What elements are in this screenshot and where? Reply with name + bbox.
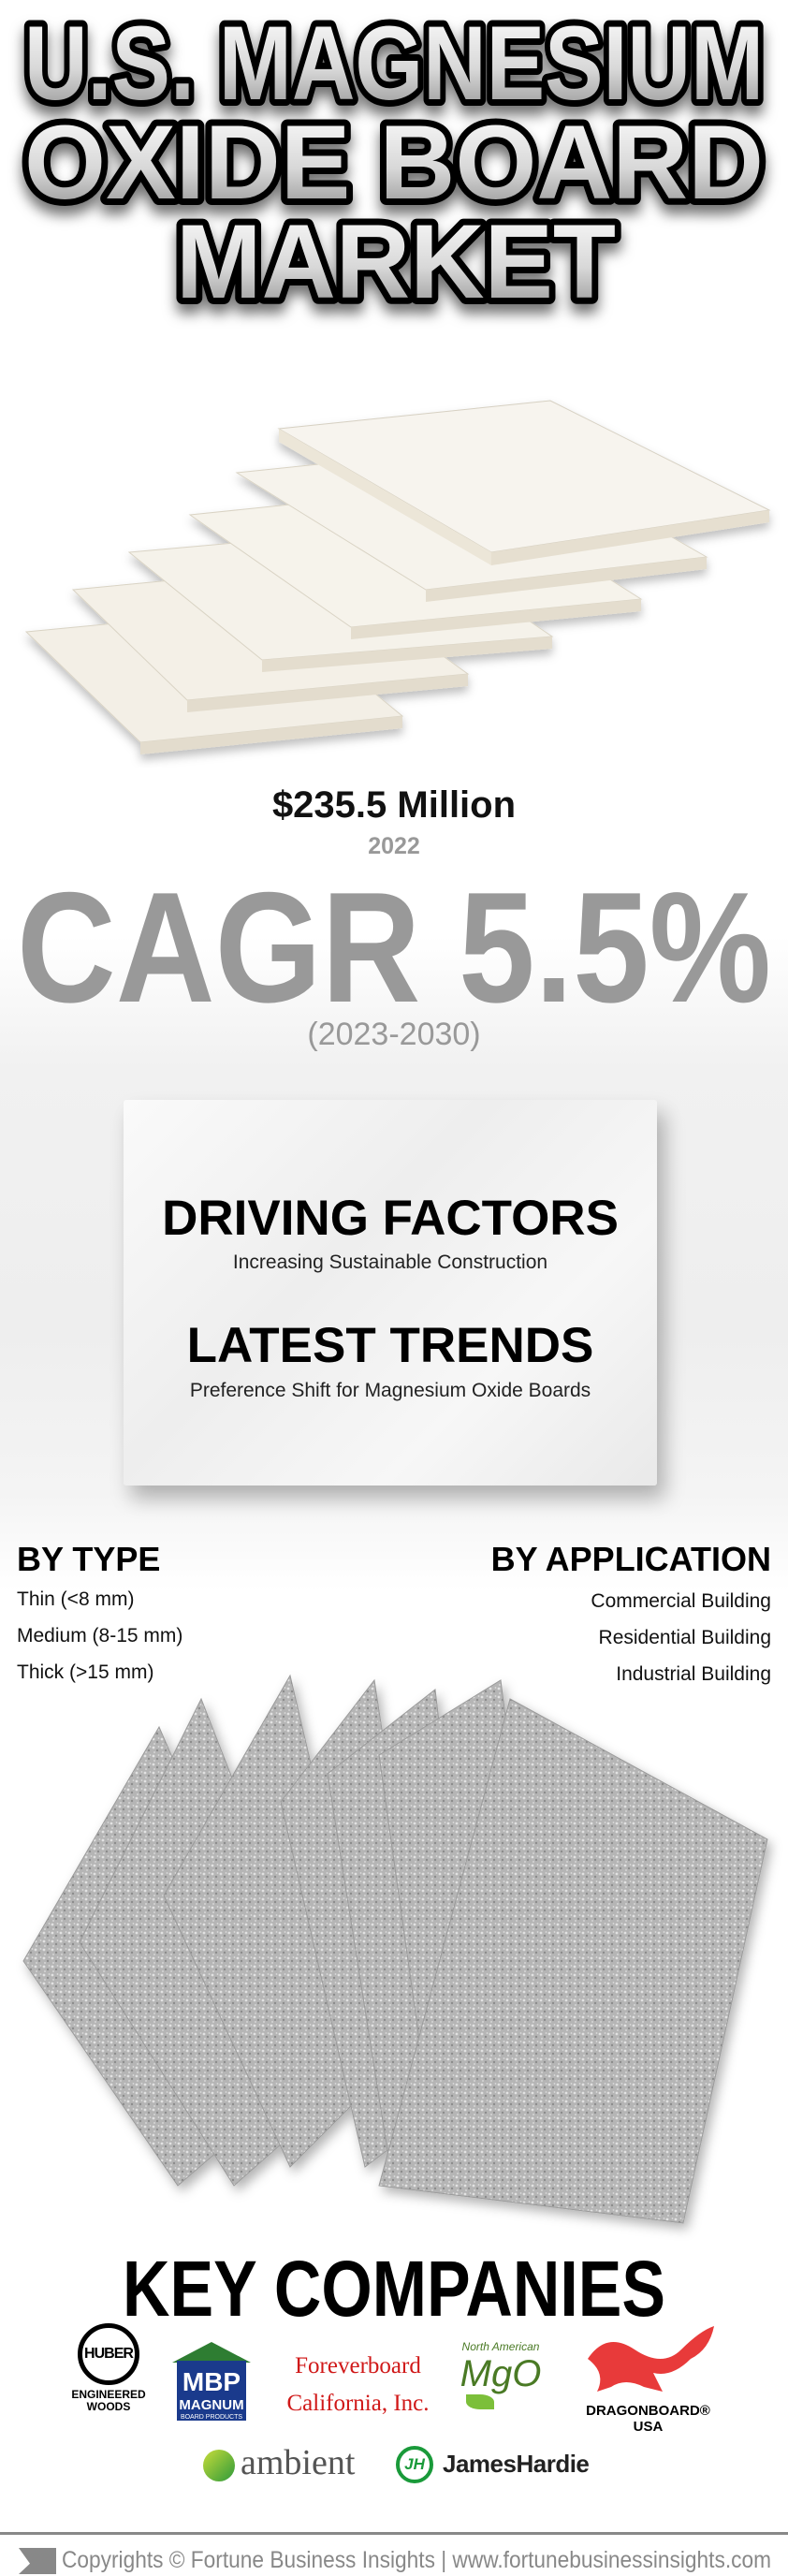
logo: huber: WOODS [87,2400,130,2413]
logo: foreverboard [286,2353,430,2416]
market value: $235.5 Million [272,784,516,826]
heading: by application: BY APPLICATION [491,1540,771,1578]
image: stacked cream boards [24,401,774,764]
logo: james hardie: JH [404,2455,425,2473]
list: applications: Residential Building [599,1627,771,1648]
logo: james hardie [396,2446,589,2483]
logo: ambient: ambient [241,2443,355,2482]
title: OXIDE BOARD [24,104,764,221]
logo: huber: ENGINEERED [71,2388,146,2401]
image: gray textured boards [22,1674,777,2235]
logo: foreverboard: California, Inc. [286,2391,430,2416]
logo: huber [71,2323,146,2413]
panel: marble board [124,1100,657,1486]
logo: mbp magnum [172,2342,251,2421]
list: types: Medium (8-15 mm) [17,1625,182,1647]
logo: huber: HUBER [84,2346,133,2362]
list: types: Thin (<8 mm) [17,1588,134,1610]
text: driving factor: Increasing Sustainable Construction [233,1251,547,1273]
textured background band [0,936,788,1591]
forecast period: (2023-2030) [307,1017,481,1052]
logo: dragonboard usa [586,2326,714,2435]
logo: mbp magnum: MBP [182,2367,241,2396]
list: applications: Industrial Building [616,1663,771,1685]
logo: mbp magnum: MAGNUM [179,2397,244,2413]
logo: james hardie: JamesHardie [443,2450,589,2478]
list: types: Thick (>15 mm) [17,1661,153,1683]
logo: north american mgo [460,2340,541,2409]
year: 2022 [368,833,420,859]
logos row 1 [71,2323,714,2435]
title [13,5,775,324]
title: MARKET [176,203,616,320]
logo: north american mgo: North American [462,2340,539,2353]
panel: by application [491,1540,771,1685]
logo: foreverboard: Foreverboard [295,2353,421,2378]
logos row 2 [203,2443,589,2483]
panel: by type [17,1540,182,1683]
icon: fbi logo [19,2548,56,2574]
heading: by type: BY TYPE [17,1540,160,1578]
logo: dragonboard usa: DRAGONBOARD® USA [586,2403,710,2435]
list: applications: Commercial Building [591,1590,771,1612]
heading: driving factors: DRIVING FACTORS [162,1191,619,1246]
heading: latest trends: LATEST TRENDS [187,1318,593,1373]
text: latest trend: Preference Shift for Magnesium Oxide Boards [190,1380,591,1401]
footer [0,2532,788,2576]
list: applications [591,1590,771,1685]
logo: mbp magnum: BOARD PRODUCTS [181,2414,242,2421]
list: types [17,1588,182,1683]
logo: north american mgo: MgO [460,2353,541,2394]
